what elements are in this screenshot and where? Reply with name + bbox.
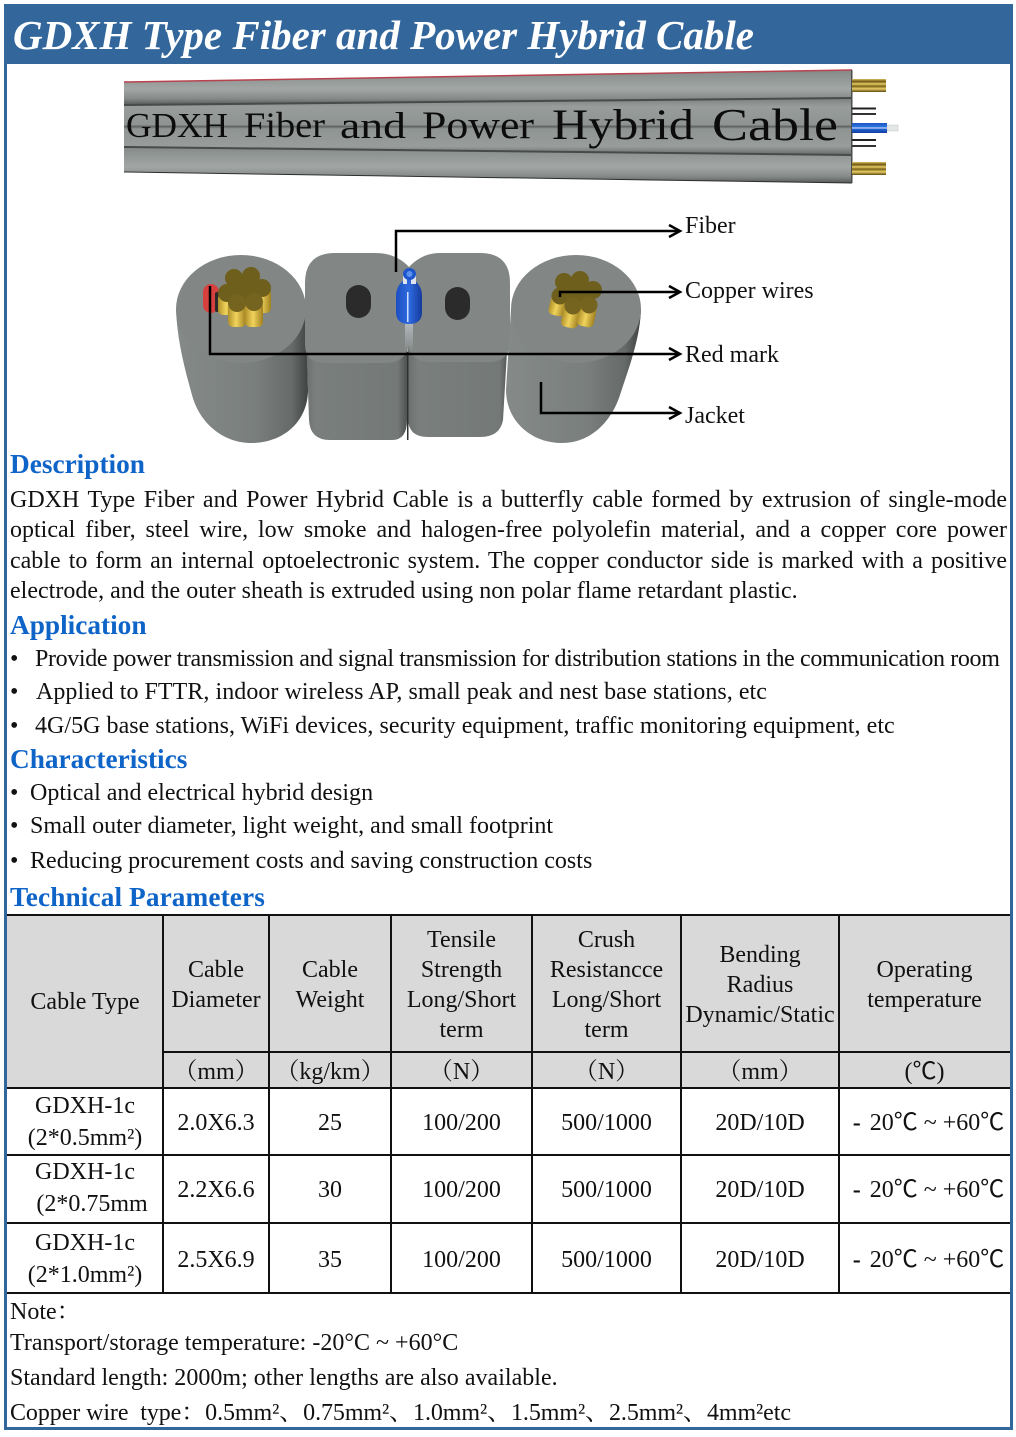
row: GDXH-1c 2*0.75: (2*0.75mm bbox=[36, 1190, 148, 1216]
header: Tensile Strength: Tensile bbox=[427, 927, 496, 953]
units row: （N） bbox=[429, 1059, 494, 1085]
arrow: copper wires bbox=[560, 286, 680, 298]
heading: Characteristics: Characteristics bbox=[10, 744, 187, 774]
arrow: jacket bbox=[541, 382, 680, 419]
row: GDXH-1c 2*1.0: 2.5X6.9 bbox=[177, 1246, 255, 1272]
row: GDXH-1c 2*1.0: 500/1000 bbox=[561, 1246, 652, 1272]
description text: optical fiber, steel wire, low smoke and halogen-free polyolefin material, and a copper core power bbox=[10, 517, 1007, 543]
cable ends: copper, steel and fiber bbox=[852, 79, 898, 175]
characteristics list: Small outer diameter, light weight, and small footprint bbox=[30, 813, 553, 839]
row: GDXH-1c 2*1.0: GDXH-1c bbox=[35, 1230, 135, 1256]
characteristics list: • bbox=[10, 813, 18, 839]
arrow: red mark bbox=[210, 286, 680, 360]
cable body bbox=[124, 70, 852, 183]
header: Crush Resistance: Long/Short bbox=[552, 987, 661, 1013]
row: GDXH-1c 2*1.0: 35 bbox=[318, 1246, 342, 1272]
header: Crush Resistance bbox=[550, 927, 663, 1043]
header: Tensile Strength bbox=[407, 927, 516, 1043]
title banner bbox=[4, 4, 1013, 64]
row: GDXH-1c 2*0.5: 100/200 bbox=[422, 1110, 501, 1136]
header: Cable Type: Cable Type bbox=[30, 989, 140, 1015]
header: Bending Radius: Radius bbox=[727, 972, 793, 998]
units row bbox=[173, 1051, 944, 1086]
printed cable text: Cable bbox=[712, 100, 838, 150]
table header background bbox=[7, 914, 1010, 1088]
application list: • bbox=[10, 713, 18, 739]
header: Crush Resistance: Crush bbox=[578, 927, 635, 953]
label: Jacket: Jacket bbox=[685, 403, 745, 429]
units row: （mm） bbox=[173, 1059, 259, 1085]
left cylinder bbox=[176, 255, 308, 443]
description text: electrode, and the outer sheath is extruded using non polar flame retardant plastic. bbox=[10, 578, 798, 604]
description text: GDXH Type Fiber and Power Hybrid Cable is a butterfly cable formed by extrusion of single-mode bbox=[10, 487, 1007, 513]
fiber bbox=[396, 268, 422, 352]
label: Copper wires: Copper wires bbox=[685, 278, 814, 304]
cable side view illustration bbox=[124, 69, 898, 184]
row: GDXH-1c 2*0.5: - 20℃ ~ +60℃ bbox=[853, 1102, 1004, 1136]
technical parameters table bbox=[7, 914, 1010, 1294]
header: Cable Weight bbox=[296, 957, 364, 1013]
label: Fiber: Fiber bbox=[685, 213, 736, 239]
row: GDXH-1c 2*0.75: GDXH-1c bbox=[35, 1158, 135, 1184]
row: GDXH-1c 2*0.75: 500/1000 bbox=[561, 1176, 652, 1202]
cable cross-section diagram bbox=[176, 224, 682, 443]
header: Cable Weight: Cable bbox=[302, 957, 358, 983]
heading: Description: Description bbox=[10, 449, 145, 479]
header: Crush Resistance: term bbox=[584, 1017, 628, 1043]
row: GDXH-1c 2*0.75 bbox=[35, 1158, 1004, 1216]
header: Operating temperature bbox=[867, 957, 982, 1013]
printed cable text bbox=[126, 100, 838, 150]
notes: Copper wire type：0.5mm²、0.75mm²、1.0mm²、1.5mm²、2.5mm²、4mm²etc bbox=[10, 1400, 791, 1426]
label: Red mark: Red mark bbox=[685, 342, 779, 368]
row: GDXH-1c 2*0.5: 20D/10D bbox=[715, 1110, 805, 1136]
row: GDXH-1c 2*1.0: 100/200 bbox=[422, 1246, 501, 1272]
printed cable text: Hybrid bbox=[552, 102, 694, 149]
right copper bundle bbox=[547, 271, 602, 329]
notes: Note： bbox=[10, 1299, 81, 1325]
header: Cable Diameter bbox=[171, 957, 261, 1013]
row: GDXH-1c 2*0.75: 20D/10D bbox=[715, 1176, 805, 1202]
heading: Application: Application bbox=[10, 610, 147, 640]
header: Operating temperature: temperature bbox=[867, 987, 982, 1013]
row: GDXH-1c 2*1.0: (2*1.0mm²) bbox=[28, 1262, 142, 1288]
row: GDXH-1c 2*0.5 bbox=[28, 1092, 1004, 1150]
notes: Standard length: 2000m; other lengths are also available. bbox=[10, 1365, 558, 1391]
row: GDXH-1c 2*1.0 bbox=[28, 1230, 1004, 1288]
application list: 4G/5G base stations, WiFi devices, security equipment, traffic monitoring equipment, etc bbox=[35, 713, 895, 739]
printed cable text: Power bbox=[422, 104, 534, 147]
notes bbox=[10, 1299, 791, 1426]
header: Tensile Strength: term bbox=[440, 1017, 483, 1043]
printed cable text: GDXH bbox=[126, 106, 228, 145]
header: Tensile Strength: Strength bbox=[421, 957, 502, 983]
header: Cable Diameter: Diameter bbox=[171, 987, 261, 1013]
header: Cable Diameter: Cable bbox=[188, 957, 244, 983]
header: Bending Radius: Dynamic/Static bbox=[685, 1002, 835, 1028]
notes: Transport/storage temperature: -20°C ~ +60°C bbox=[10, 1330, 458, 1356]
header: Bending Radius: Bending bbox=[719, 942, 801, 968]
units row: （kg/km） bbox=[275, 1059, 385, 1085]
right cylinder bbox=[506, 255, 641, 443]
row: GDXH-1c 2*0.75: 30 bbox=[318, 1176, 342, 1202]
heading: Technical Parameters: Technical Parameters bbox=[10, 882, 265, 912]
application list bbox=[10, 646, 1000, 739]
arrow: fiber bbox=[396, 225, 680, 272]
description text: cable to form an internal optoelectronic system. The copper conductor side is marked with a positive bbox=[10, 548, 1007, 574]
characteristics list: Reducing procurement costs and saving construction costs bbox=[30, 848, 592, 874]
application list: Provide power transmission and signal transmission for distribution stations in the communication room bbox=[35, 646, 1000, 672]
row: GDXH-1c 2*0.5: (2*0.5mm²) bbox=[28, 1124, 142, 1150]
units row: （mm） bbox=[717, 1059, 803, 1085]
middle right block bbox=[407, 253, 510, 440]
application list: Applied to FTTR, indoor wireless AP, small peak and nest base stations, etc bbox=[36, 679, 767, 705]
middle left block bbox=[305, 253, 409, 440]
header: Tensile Strength: Long/Short bbox=[407, 987, 516, 1013]
left copper bundle bbox=[218, 267, 271, 327]
red mark bbox=[203, 284, 219, 313]
row: GDXH-1c 2*1.0: - 20℃ ~ +60℃ bbox=[853, 1238, 1004, 1274]
row: GDXH-1c 2*0.5: 25 bbox=[318, 1110, 342, 1136]
title banner: GDXH Type Fiber and Power Hybrid Cable bbox=[13, 12, 754, 58]
description text bbox=[10, 487, 1007, 604]
row: GDXH-1c 2*0.5: GDXH-1c bbox=[35, 1092, 135, 1118]
row: GDXH-1c 2*0.5: 2.0X6.3 bbox=[177, 1110, 255, 1136]
header: Operating temperature: Operating bbox=[876, 957, 972, 983]
header: Cable Weight: Weight bbox=[296, 987, 364, 1013]
header: Crush Resistance: Resistancce bbox=[550, 957, 663, 983]
header: Bending Radius bbox=[685, 942, 835, 1028]
units row: （N） bbox=[574, 1059, 639, 1085]
application list: • bbox=[10, 679, 18, 705]
characteristics list: • bbox=[10, 848, 18, 874]
units row: (℃) bbox=[904, 1051, 944, 1086]
characteristics list: Optical and electrical hybrid design bbox=[30, 780, 373, 806]
application list: • bbox=[10, 646, 18, 672]
printed cable text: and bbox=[340, 106, 407, 147]
characteristics list: • bbox=[10, 780, 18, 806]
row: GDXH-1c 2*0.75: 2.2X6.6 bbox=[177, 1176, 255, 1202]
row: GDXH-1c 2*0.75: - 20℃ ~ +60℃ bbox=[853, 1168, 1004, 1204]
steel wires bbox=[346, 285, 470, 320]
characteristics list bbox=[10, 780, 592, 874]
row: GDXH-1c 2*0.5: 500/1000 bbox=[561, 1110, 652, 1136]
row: GDXH-1c 2*0.75: 100/200 bbox=[422, 1176, 501, 1202]
row: GDXH-1c 2*1.0: 20D/10D bbox=[715, 1246, 805, 1272]
printed cable text: Fiber bbox=[244, 105, 325, 145]
